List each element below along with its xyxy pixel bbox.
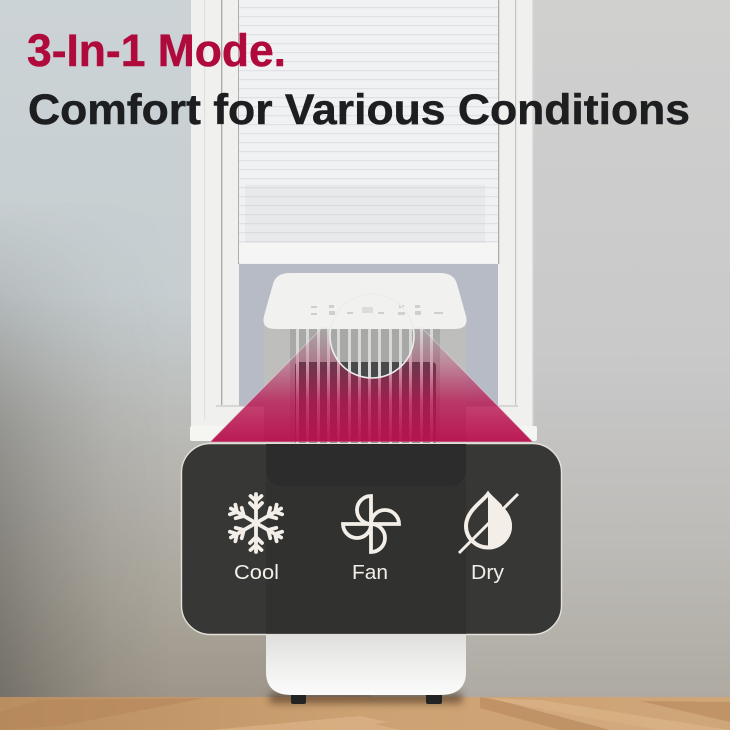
zoom beam	[210, 328, 533, 442]
dark inner grille	[295, 362, 436, 452]
zoom circle	[330, 294, 414, 378]
grille slats	[296, 329, 433, 444]
window frame	[190, 0, 537, 441]
icon: snowflake	[228, 494, 284, 552]
top lid	[263, 273, 467, 329]
icon: dry (crossed drop)	[459, 491, 518, 553]
window glass	[239, 264, 498, 406]
control panel marks	[311, 305, 443, 315]
background: floor	[0, 693, 730, 730]
title line 2: Comfort for Various Conditions	[28, 86, 690, 134]
window blinds	[239, 0, 498, 263]
title	[27, 25, 690, 134]
lower body of unit	[266, 630, 466, 704]
panel: modes	[182, 444, 562, 634]
label: Dry: Dry	[471, 561, 505, 584]
icon: fan	[343, 496, 399, 552]
air conditioner unit	[263, 273, 467, 452]
wheels	[291, 693, 442, 704]
title line 1: 3-In-1 Mode.	[27, 25, 286, 76]
label: Cool: Cool	[234, 561, 279, 584]
label: Fan: Fan	[352, 561, 388, 584]
